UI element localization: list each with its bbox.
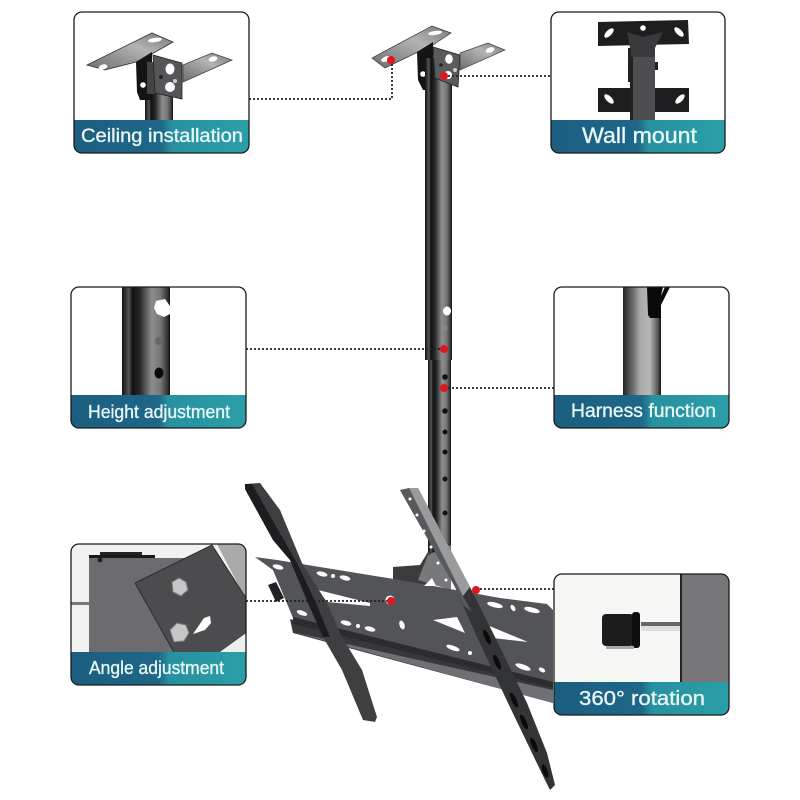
banner: 360 rotation	[554, 682, 729, 715]
connector: ceiling installation	[249, 60, 392, 99]
main product: ceiling bracket	[372, 26, 505, 92]
banner: harness function	[554, 395, 729, 428]
heading: angle adjustment: Angle adjustment	[89, 658, 224, 678]
icon: knob and screw detail	[602, 574, 729, 684]
panel: harness function	[554, 287, 729, 428]
panel: angle adjustment	[71, 544, 246, 685]
main product: TV mounting plate	[255, 545, 553, 703]
connector: wall mount	[444, 75, 551, 77]
heading: harness function: Harness function	[571, 401, 716, 422]
connector: angle adjustment	[246, 600, 391, 602]
connector: harness function	[444, 387, 554, 389]
heading: 360 rotation: 360° rotation	[579, 688, 705, 710]
banner: wall mount	[551, 120, 725, 153]
main product: right vertical arm	[400, 488, 555, 790]
connector: height adjustment	[246, 348, 444, 350]
marker dots	[387, 56, 480, 605]
icon: ceiling bracket detail	[87, 33, 232, 122]
icon: pole with strap detail	[623, 287, 670, 397]
panel: height adjustment	[71, 287, 246, 428]
main product: telescopic pole	[425, 85, 452, 580]
panel: ceiling installation	[74, 12, 249, 153]
main product: left vertical arm	[245, 483, 377, 722]
panel: wall mount	[551, 12, 725, 153]
icon: wall plate detail	[598, 20, 689, 121]
heading: height adjustment: Height adjustment	[88, 402, 230, 422]
panel: 360 rotation	[554, 574, 729, 715]
banner: ceiling installation	[74, 120, 249, 153]
connector: 360 rotation	[476, 588, 554, 590]
heading: ceiling installation: Ceiling installation	[81, 126, 243, 147]
banner: height adjustment	[71, 395, 246, 428]
icon: angle bolts detail	[71, 544, 246, 654]
icon: pole holes detail	[122, 287, 170, 397]
heading: wall mount: Wall mount	[582, 123, 697, 148]
banner: angle adjustment	[71, 652, 246, 685]
